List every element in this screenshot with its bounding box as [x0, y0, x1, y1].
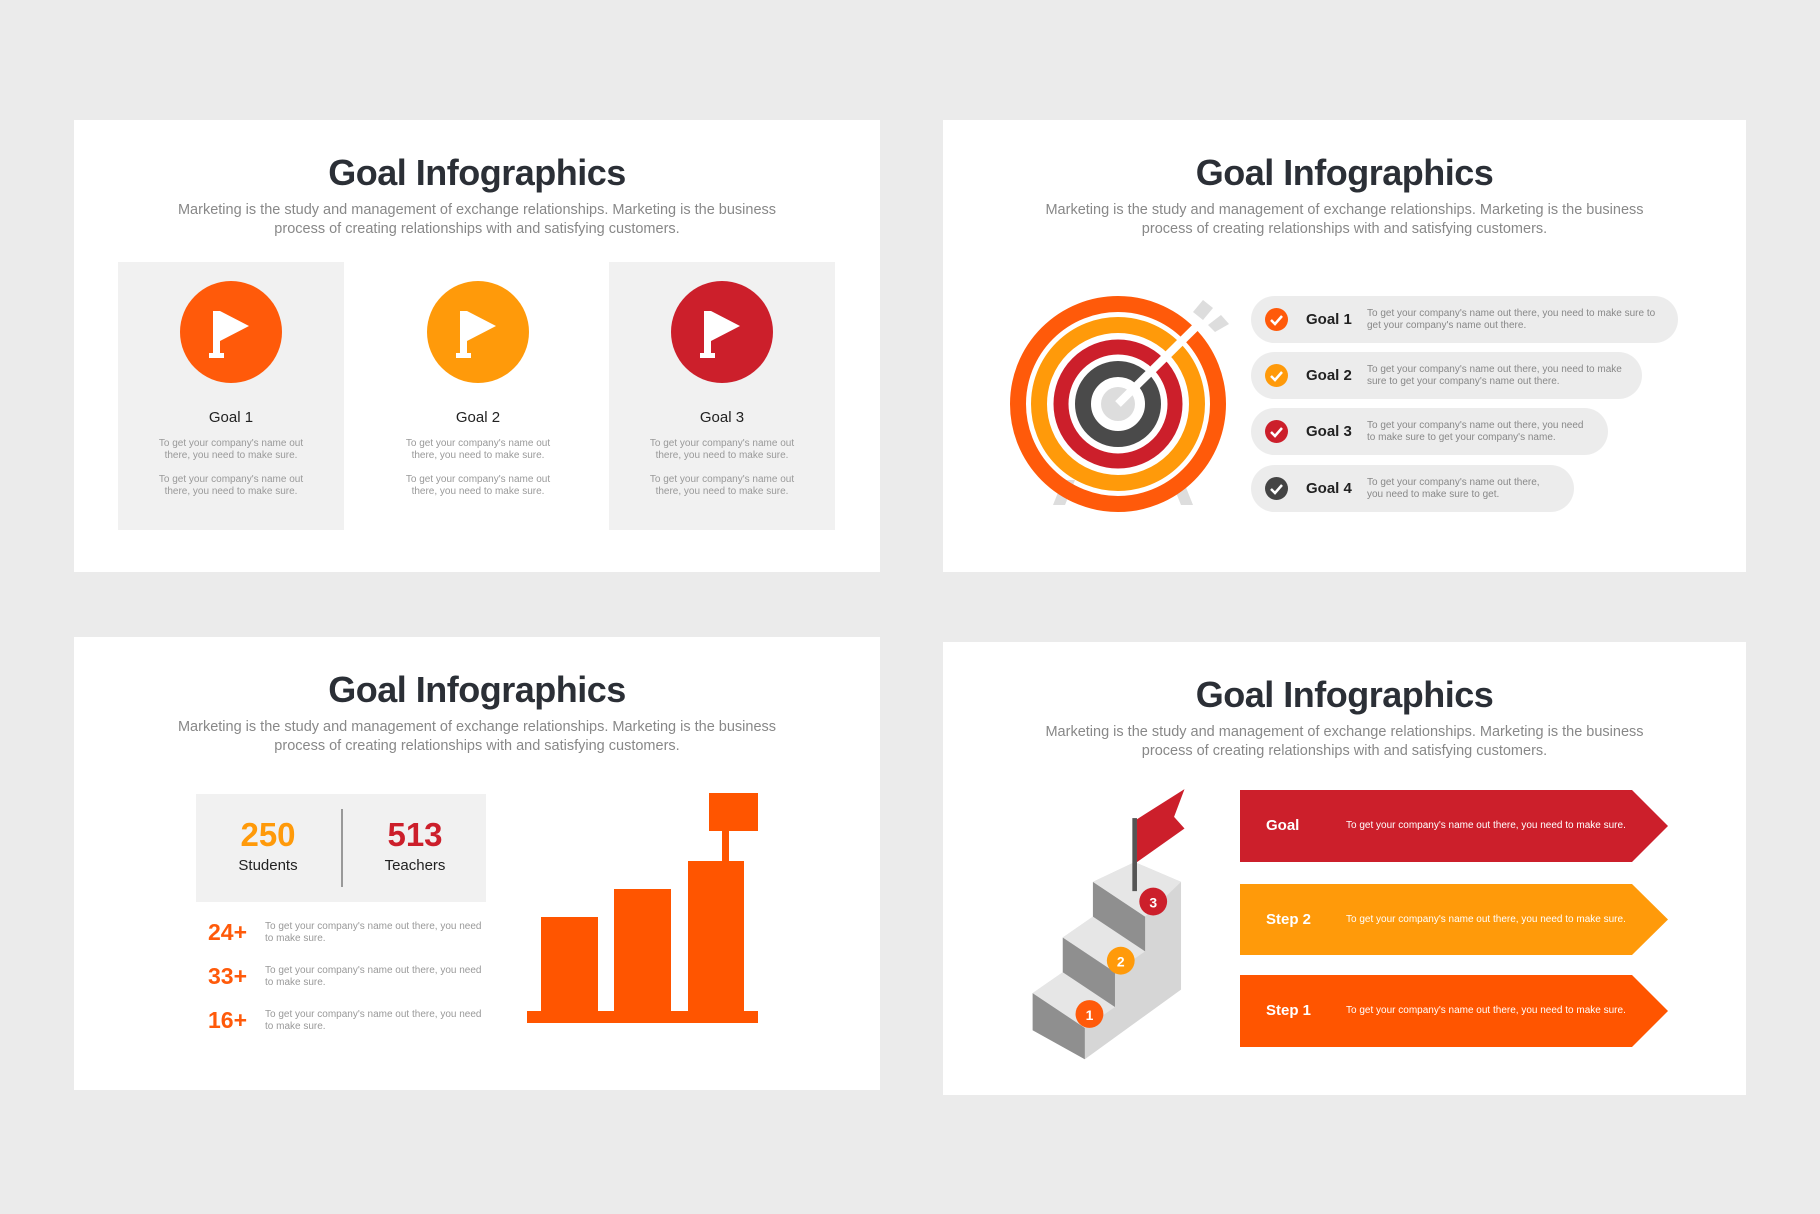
list: goal pills — [1251, 296, 1678, 512]
list: stat items: to make sure. — [265, 1021, 326, 1032]
subtitle — [1045, 724, 1644, 759]
subtitle: Marketing is the study and management of exchange relationships. Marketing is the business — [178, 719, 776, 735]
icon: stairs with flag — [1032, 789, 1184, 1060]
arrow: goal: To get your company's name out there, you need to make sure. — [1346, 820, 1626, 831]
bar chart with flag — [527, 793, 758, 1023]
pill: goal 3: Goal 3 — [1306, 423, 1352, 440]
arrow: step 2: To get your company's name out there, you need to make sure. — [1346, 914, 1626, 925]
card: goal 1: there, you need to make sure. — [165, 450, 297, 461]
card: goal 3: there, you need to make sure. — [656, 450, 788, 461]
list: stat items: to make sure. — [265, 933, 326, 944]
pill: goal 2: To get your company's name out there, you need to make — [1367, 364, 1622, 375]
panel: target goals — [943, 120, 1746, 572]
panel: three goals — [74, 120, 880, 572]
pill: goal 4: you need to make sure to get. — [1367, 489, 1499, 500]
pill: goal 3: to make sure to get your company's name. — [1367, 432, 1556, 443]
pill: goal 4: To get your company's name out there, — [1367, 477, 1540, 488]
subtitle: process of creating relationships with and satisfying customers. — [274, 738, 680, 754]
title: Goal Infographics — [328, 152, 626, 193]
card: goal 1 — [118, 262, 344, 530]
arrow: step 2: Step 2 — [1266, 911, 1311, 928]
card: goal 3: To get your company's name out — [650, 474, 794, 485]
card: goal 1: To get your company's name out — [159, 438, 303, 449]
pill: goal 1: get your company's name out there. — [1367, 320, 1526, 331]
pill: goal 1: To get your company's name out there, you need to make sure to — [1367, 308, 1655, 319]
pill: goal 2 — [1251, 352, 1642, 399]
list: stat items: To get your company's name out there, you need — [265, 965, 481, 976]
subtitle: Marketing is the study and management of exchange relationships. Marketing is the business — [1045, 724, 1644, 740]
icon: stairs with flag: 1 — [1086, 1007, 1094, 1023]
panel: stats and chart — [74, 637, 880, 1090]
list: stat items: 24+ — [208, 919, 247, 945]
list: stat items — [208, 919, 481, 1033]
list: stat items: To get your company's name out there, you need — [265, 921, 481, 932]
card: goal 3: there, you need to make sure. — [656, 486, 788, 497]
icon: flag circle red — [671, 281, 773, 383]
pill: goal 3 — [1251, 408, 1608, 455]
list: stat items: To get your company's name out there, you need — [265, 1009, 481, 1020]
subtitle: process of creating relationships with and satisfying customers. — [1142, 221, 1547, 237]
card: goal 1: Goal 1 — [209, 409, 253, 426]
arrow: step 2 — [1240, 884, 1668, 955]
card: goal 1: there, you need to make sure. — [165, 486, 297, 497]
card: goal 2 — [406, 281, 550, 497]
card: goal 2: To get your company's name out — [406, 474, 550, 485]
subtitle: process of creating relationships with and satisfying customers. — [274, 221, 680, 237]
pill: goal 4 — [1251, 465, 1574, 512]
subtitle: Marketing is the study and management of exchange relationships. Marketing is the business — [1045, 202, 1644, 218]
icon: flag circle amber — [427, 281, 529, 383]
icon: flag circle orange — [180, 281, 282, 383]
arrow: goal: Goal — [1266, 817, 1299, 834]
pill: goal 1: Goal 1 — [1306, 311, 1352, 328]
subtitle: process of creating relationships with and satisfying customers. — [1142, 743, 1547, 759]
card: goal 2: Goal 2 — [456, 409, 500, 426]
subtitle — [1045, 202, 1644, 237]
arrow: step 1 — [1240, 975, 1668, 1047]
title: Goal Infographics — [1196, 674, 1493, 715]
title: Goal Infographics — [328, 669, 626, 710]
stats box: 513 — [387, 816, 443, 853]
stats box: Teachers — [385, 857, 445, 874]
arrow: goal — [1240, 790, 1668, 862]
panel: steps — [943, 642, 1746, 1095]
subtitle — [178, 202, 776, 237]
title: Goal Infographics — [1196, 152, 1493, 193]
stats box: 250 — [240, 816, 296, 853]
card: goal 3 — [609, 262, 835, 530]
card: goal 3: To get your company's name out — [650, 438, 794, 449]
pill: goal 1 — [1251, 296, 1678, 343]
pill: goal 2: sure to get your company's name out there. — [1367, 376, 1560, 387]
icon: stairs with flag: 2 — [1117, 953, 1125, 969]
arrow: step 1: Step 1 — [1266, 1002, 1311, 1019]
list: stat items: to make sure. — [265, 977, 326, 988]
card: goal 2: there, you need to make sure. — [412, 450, 544, 461]
arrow: step 1: To get your company's name out there, you need to make sure. — [1346, 1005, 1626, 1016]
card: goal 2: To get your company's name out — [406, 438, 550, 449]
pill: goal 3: To get your company's name out there, you need — [1367, 420, 1583, 431]
icon: stairs with flag: 3 — [1149, 894, 1157, 910]
card: goal 1: To get your company's name out — [159, 474, 303, 485]
card: goal 3: Goal 3 — [700, 409, 744, 426]
list: stat items: 33+ — [208, 963, 247, 989]
pill: goal 4: Goal 4 — [1306, 480, 1352, 497]
pill: goal 2: Goal 2 — [1306, 367, 1352, 384]
stats box — [196, 794, 486, 902]
subtitle: Marketing is the study and management of exchange relationships. Marketing is the business — [178, 202, 776, 218]
card: goal 2: there, you need to make sure. — [412, 486, 544, 497]
list: stat items: 16+ — [208, 1007, 247, 1033]
stats box: Students — [238, 857, 298, 874]
subtitle — [178, 719, 776, 754]
icon: target — [1010, 296, 1229, 512]
